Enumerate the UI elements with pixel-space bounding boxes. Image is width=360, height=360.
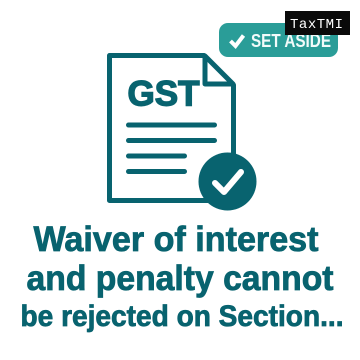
- icon: GST document: [110, 56, 234, 200]
- badge label: SET ASIDE: [251, 31, 331, 51]
- title line 2: and penalty cannot: [26, 259, 334, 298]
- title: [20, 220, 344, 333]
- watermark: TaxTMI: [285, 11, 350, 35]
- document heading: GST: GST: [128, 74, 200, 114]
- icon: check badge: [198, 152, 256, 210]
- badge check mark: [230, 36, 244, 46]
- document outline: [110, 56, 234, 200]
- badge: SET ASIDE: [219, 23, 338, 57]
- document text lines: [128, 125, 214, 172]
- watermark: TaxTMI: TaxTMI: [290, 17, 343, 33]
- document folded corner: [205, 56, 233, 84]
- title line 1: Waiver of interest: [34, 220, 319, 259]
- title line 3: be rejected on Section...: [20, 300, 344, 333]
